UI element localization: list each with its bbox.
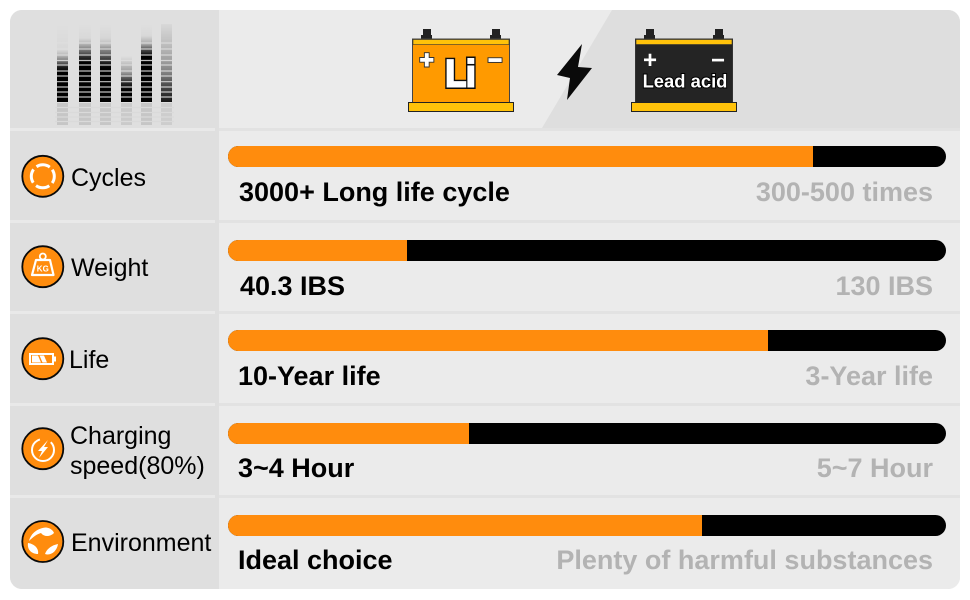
equalizer graphic bbox=[55, 24, 174, 125]
label: cycles: Cycles bbox=[71, 164, 146, 192]
icon: lead acid battery: Lead acid bbox=[643, 70, 727, 92]
icon: life bbox=[22, 338, 63, 379]
icon: lithium battery bbox=[408, 29, 514, 112]
bar: weight bbox=[228, 240, 946, 261]
icon: lithium battery: − bbox=[488, 47, 502, 74]
icon: charging bbox=[22, 428, 63, 469]
icon: lithium battery: Li bbox=[446, 54, 476, 96]
value: lead acid environment: Plenty of harmful substances bbox=[556, 545, 933, 575]
icon: environment bbox=[22, 521, 63, 562]
value: lithium charging: 3~4 Hour bbox=[238, 453, 355, 483]
row: life bbox=[22, 330, 946, 391]
value: lithium weight: 40.3 IBS bbox=[240, 271, 345, 301]
icon: lead acid battery bbox=[632, 29, 736, 112]
icon: lightning bolt bbox=[557, 44, 592, 100]
row: charging speed bbox=[22, 422, 946, 483]
bar: life bbox=[228, 330, 946, 351]
icon: lead acid battery: + bbox=[643, 47, 657, 74]
label: charging speed: speed(80%) bbox=[70, 452, 205, 480]
label: life: Life bbox=[69, 346, 109, 374]
label: environment: Environment bbox=[71, 529, 211, 557]
label: weight: Weight bbox=[71, 254, 148, 282]
value: lead acid cycles: 300-500 times bbox=[756, 177, 933, 207]
value: lead acid life: 3-Year life bbox=[805, 361, 933, 391]
row: weight bbox=[22, 240, 946, 301]
icon: lithium battery: + bbox=[420, 47, 434, 74]
value: lead acid charging: 5~7 Hour bbox=[817, 453, 933, 483]
bar: environment bbox=[228, 515, 946, 536]
bar: charging speed bbox=[228, 423, 946, 444]
icon: weight: KG bbox=[37, 264, 49, 274]
value: lithium cycles: 3000+ Long life cycle bbox=[239, 177, 510, 207]
row: environment bbox=[22, 515, 946, 575]
label: charging speed: Charging bbox=[70, 422, 171, 450]
icon: weight bbox=[22, 246, 63, 287]
bar: cycles bbox=[228, 146, 946, 167]
value: lithium life: 10-Year life bbox=[238, 361, 381, 391]
label: charging speed bbox=[70, 422, 205, 480]
value: lead acid weight: 130 IBS bbox=[835, 271, 933, 301]
row: cycles bbox=[22, 146, 946, 207]
icon: lead acid battery: − bbox=[711, 47, 725, 74]
icon: cycles bbox=[22, 156, 63, 197]
value: lithium environment: Ideal choice bbox=[238, 545, 393, 575]
